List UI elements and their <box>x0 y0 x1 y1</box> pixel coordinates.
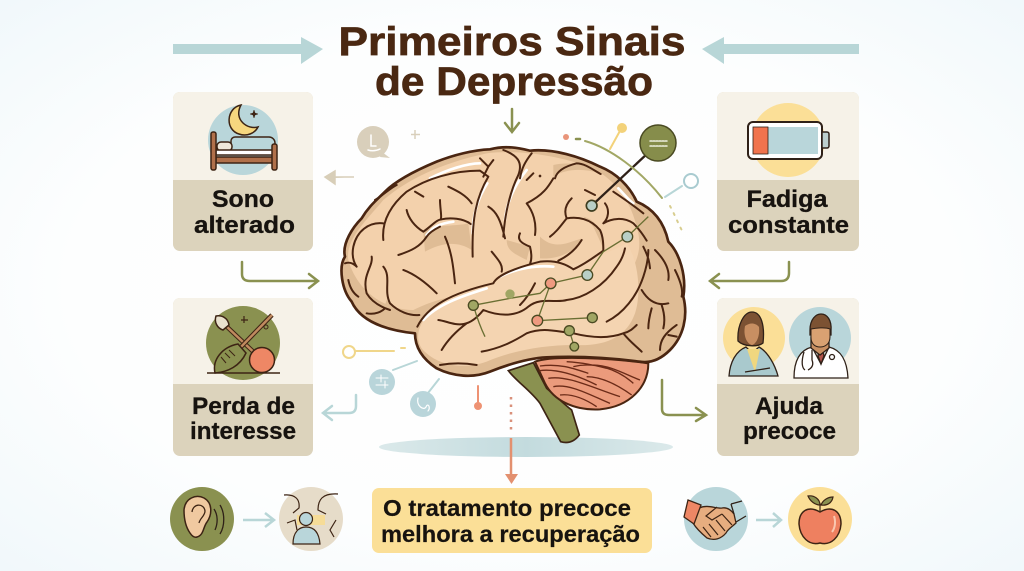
icon: people <box>279 487 343 551</box>
decorations: left connectors <box>343 346 482 417</box>
arrow: ear to people <box>243 513 274 527</box>
title: Primeiros Sinais <box>338 20 686 64</box>
icon: brush, broom and ball <box>206 306 280 380</box>
icon: moon and bed <box>208 105 278 175</box>
arrow: handshake to apple <box>756 513 781 527</box>
label: sono alterado: alterado <box>194 212 295 239</box>
panel: sono alterado <box>173 92 313 251</box>
icon: handshake <box>684 487 748 551</box>
arrow: brain to treatment <box>505 397 518 484</box>
icon: sliders <box>369 369 395 395</box>
callout: treatment message <box>372 488 652 553</box>
arrow: title to brain <box>505 109 519 132</box>
label: sono alterado: Sono <box>212 186 274 213</box>
label: sono alterado <box>194 186 295 239</box>
arrow: title left <box>173 37 323 64</box>
label: perda de interesse: Perda de <box>192 393 295 420</box>
cerebellum <box>535 358 648 409</box>
label: fadiga constante <box>728 186 849 239</box>
arrow: sono to brain <box>242 262 318 288</box>
icon: stethoscope <box>410 391 436 417</box>
decorations: right connectors <box>563 123 698 232</box>
label: perda de interesse: interesse <box>190 418 296 445</box>
sulci <box>345 150 682 365</box>
callout: treatment message: melhora a recuperação <box>381 521 640 547</box>
title: de Depressão <box>375 60 653 104</box>
brain illustration <box>342 143 685 442</box>
arrow: brain to sono <box>325 171 354 184</box>
panel: fadiga constante <box>717 92 859 251</box>
panel: ajuda precoce <box>717 298 859 456</box>
title <box>338 20 686 104</box>
icon: apple <box>788 487 852 551</box>
label: perda de interesse <box>190 393 296 445</box>
icon: chat bubble with clock <box>357 126 390 158</box>
icon: patient and doctor <box>723 307 851 378</box>
label: ajuda precoce: Ajuda <box>755 393 824 420</box>
neural network overlay <box>468 143 658 351</box>
icon: olive node badge <box>640 125 676 161</box>
callout: treatment message: O tratamento precoce <box>383 495 631 521</box>
arrow: brain to ajuda <box>662 380 706 421</box>
arrow: title right <box>702 37 859 64</box>
ground shadow <box>379 437 673 457</box>
label: ajuda precoce <box>743 393 836 445</box>
label: fadiga constante: Fadiga <box>746 186 828 213</box>
highlights <box>423 163 633 320</box>
brainstem <box>508 363 579 442</box>
arrow: fadiga to brain <box>710 262 789 288</box>
label: ajuda precoce: precoce <box>743 418 836 445</box>
panel: perda de interesse <box>173 298 313 456</box>
decoration: plus <box>411 130 420 139</box>
arrow: brain to perda <box>323 395 356 420</box>
icon: low battery <box>748 103 829 177</box>
icon: ear <box>170 487 234 551</box>
cerebrum <box>342 147 685 376</box>
label: fadiga constante: constante <box>728 212 849 239</box>
